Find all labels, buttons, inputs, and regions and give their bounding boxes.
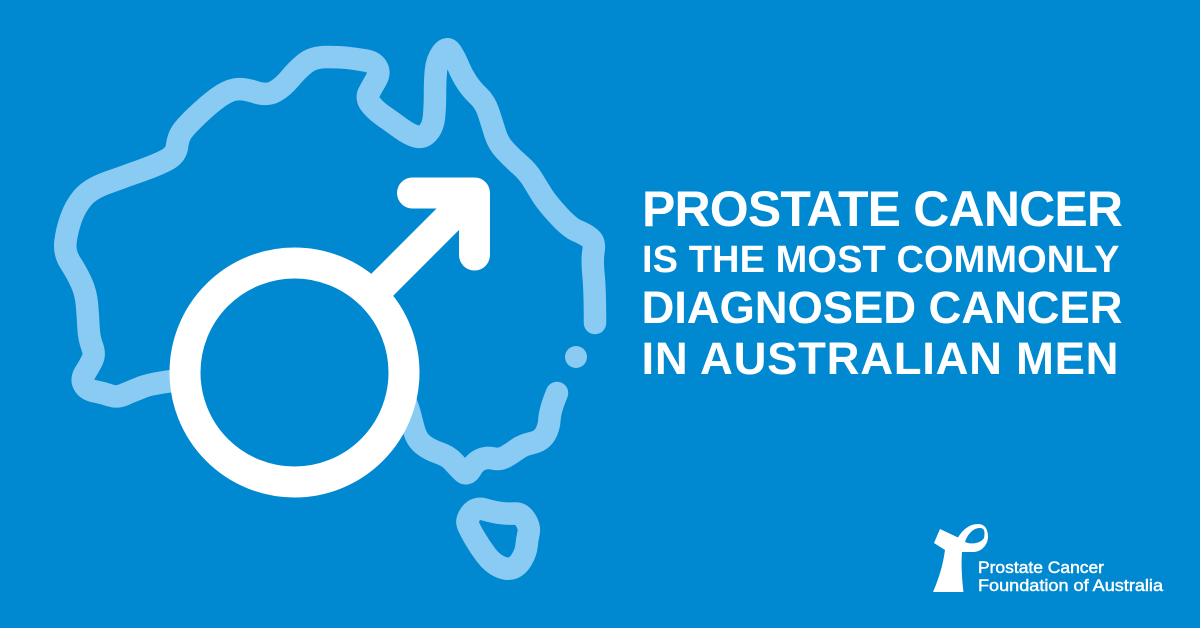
headline text	[642, 181, 1123, 384]
logo icon: ribbon	[933, 524, 988, 592]
small island dot	[565, 346, 587, 368]
male symbol arrow head	[412, 193, 474, 255]
icon: male symbol	[185, 193, 474, 482]
logo: Prostate Cancer Foundation of Australia	[933, 524, 1164, 595]
mainland: south coast	[405, 393, 557, 473]
headline line 3: DIAGNOSED CANCER	[642, 282, 1122, 333]
map: outline of Australia	[65, 49, 595, 569]
headline line 2: IS THE MOST COMMONLY	[642, 239, 1120, 281]
headline line 4: IN AUSTRALIAN MEN	[642, 333, 1118, 384]
male symbol arrow shaft	[380, 193, 474, 287]
mainland: west, north and east coast	[65, 49, 595, 396]
male symbol ring	[185, 263, 404, 482]
logo wordmark line 1: Prostate Cancer	[978, 559, 1105, 577]
headline line 1: PROSTATE CANCER	[642, 181, 1123, 237]
logo wordmark line 2: Foundation of Australia	[978, 577, 1164, 595]
Tasmania	[467, 509, 529, 569]
